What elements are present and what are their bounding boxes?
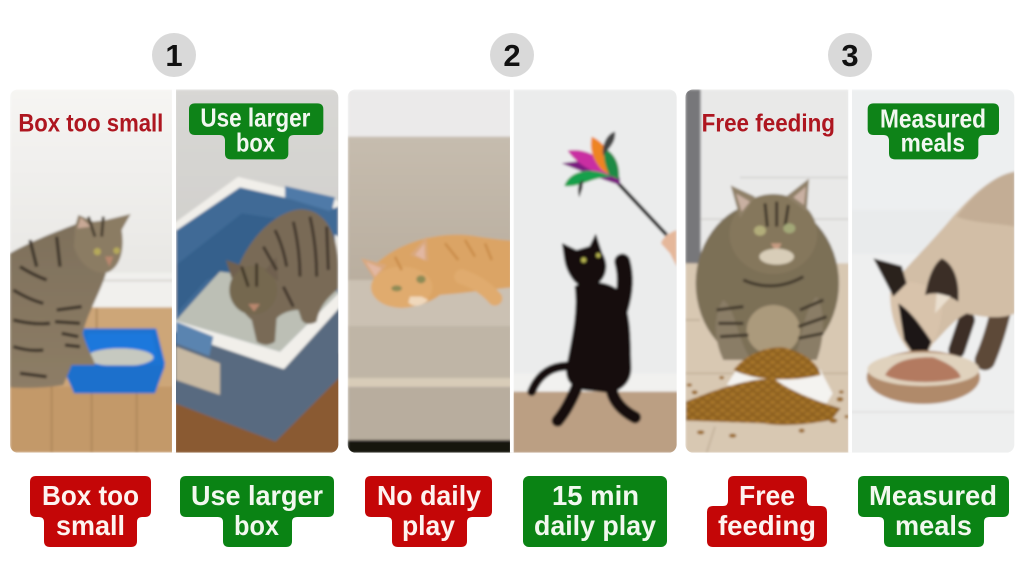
panel group 1: litter box <box>10 87 341 457</box>
bottom label: Box too small: Box too <box>42 480 139 511</box>
bottom label: Measured meals <box>858 476 1009 547</box>
bottom label: Box too small <box>30 476 151 547</box>
bottom label: 15 min daily play: daily play <box>534 510 656 541</box>
gutter between photos <box>848 87 852 457</box>
bottom label: Use larger box: box <box>234 510 279 541</box>
badge: Use larger box: box <box>236 127 275 157</box>
photo: larger box with tabby cat <box>175 89 341 453</box>
photo: small box with tabby cat <box>10 89 173 453</box>
bottom label: Use larger box: Use larger <box>191 480 323 511</box>
bowl <box>867 351 980 404</box>
step number 2: 2 <box>503 38 521 73</box>
bottom label: Use larger box <box>180 476 334 547</box>
black cat <box>532 235 635 421</box>
photo: orange cat on sofa <box>348 89 512 453</box>
caption: Free feeding: Free feeding <box>702 110 835 138</box>
bottom label: Box too small: small <box>56 510 125 541</box>
photo: overweight tabby with overflowing bowl <box>685 89 849 453</box>
panel group 3: feeding <box>685 87 1017 457</box>
bottom label: 15 min daily play: 15 min <box>552 480 639 511</box>
step number 1: 1 <box>165 38 183 73</box>
photo: siamese cat eating measured meal <box>850 89 1017 454</box>
panel group 2: daily play <box>348 87 679 457</box>
bottom label: 15 min daily play <box>523 476 667 547</box>
caption: Box too small: Box too small <box>18 110 163 138</box>
bottom label: No daily play: play <box>402 510 455 541</box>
step number 2 <box>490 33 534 77</box>
head <box>888 291 934 352</box>
body <box>901 184 1014 344</box>
back legs <box>957 320 967 350</box>
badge: Measured meals: Measured <box>880 104 986 134</box>
bottom label: Measured meals: Measured <box>869 480 997 511</box>
step number 1 <box>152 33 196 77</box>
step number 3: 3 <box>841 38 859 73</box>
bottom label: Free feeding <box>707 476 827 547</box>
badge: Use larger box <box>189 103 323 159</box>
photo: black cat jumping at feather toy <box>512 89 679 453</box>
step number 3 <box>828 33 872 77</box>
gutter between photos <box>510 87 514 457</box>
bottom label: Measured meals: meals <box>895 510 972 541</box>
bottom label: No daily play: No daily <box>377 480 481 511</box>
gutter between photos <box>172 87 176 457</box>
badge: Use larger box: Use larger <box>200 103 310 133</box>
bottom label: Free feeding: Free <box>739 480 795 511</box>
bottom label: Free feeding: feeding <box>718 510 816 541</box>
badge: Measured meals <box>868 103 999 159</box>
hand <box>661 230 677 267</box>
toy wand and feathers <box>562 132 667 235</box>
bottom label: No daily play <box>365 476 492 547</box>
badge: Measured meals: meals <box>901 128 965 158</box>
